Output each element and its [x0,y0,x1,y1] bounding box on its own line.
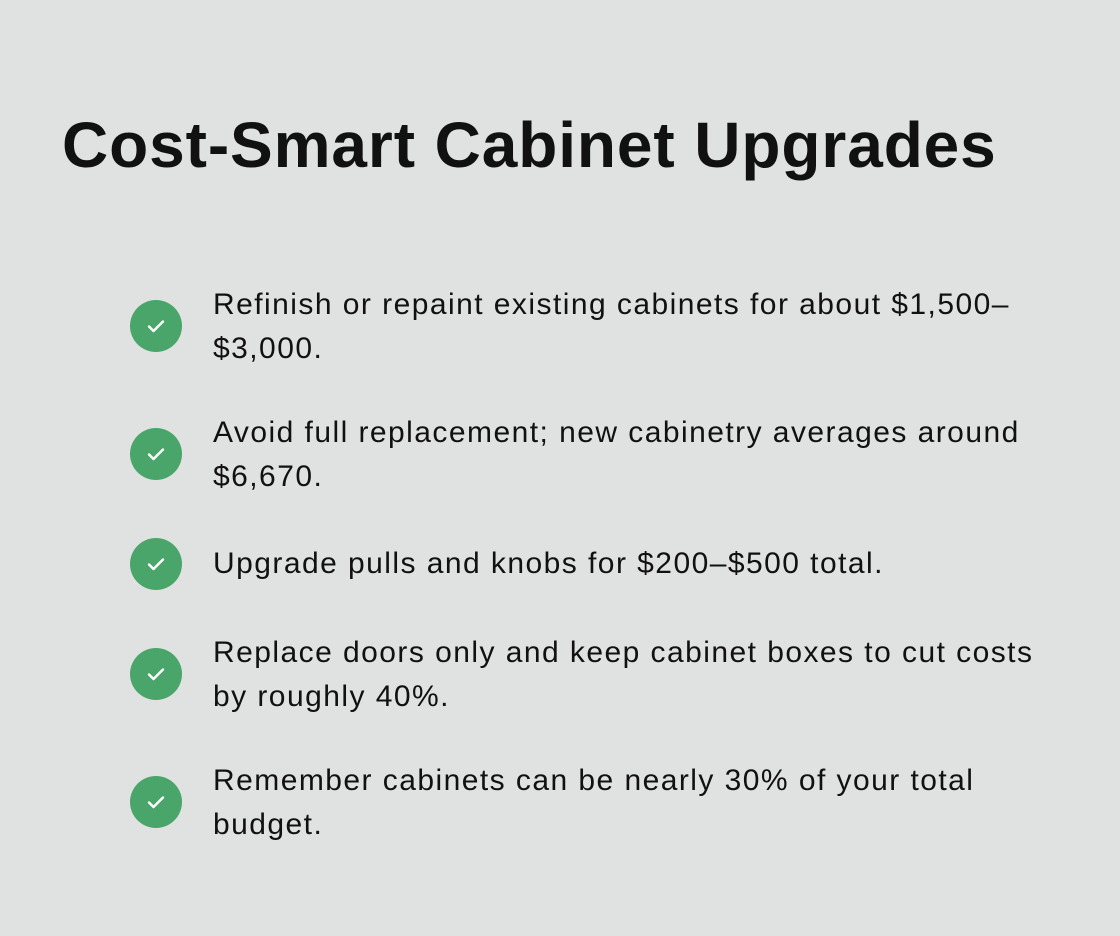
icon: check [130,776,182,828]
icon: check [130,648,182,700]
text: Avoid full replacement; new cabinetry averages around [213,416,1020,449]
item 2 [130,416,1020,493]
text: Remember cabinets can be nearly 30% of your total [213,764,974,797]
icon: check [130,428,182,480]
item 1 [130,288,1010,365]
text [213,636,1033,713]
text: Upgrade pulls and knobs for $200–$500 total. [213,547,884,580]
text: by roughly 40%. [213,680,450,713]
text [213,288,1010,365]
text [213,416,1020,493]
title: Cost-Smart Cabinet Upgrades [62,109,997,181]
icon: check [130,538,182,590]
item 3 [130,538,884,590]
text: $3,000. [213,332,323,365]
item 5 [130,764,974,841]
text: $6,670. [213,460,323,493]
text: Refinish or repaint existing cabinets for about $1,500– [213,288,1010,321]
text: budget. [213,808,323,841]
icon: check [130,300,182,352]
text [213,764,974,841]
text: Replace doors only and keep cabinet boxes to cut costs [213,636,1033,669]
item 4 [130,636,1033,713]
